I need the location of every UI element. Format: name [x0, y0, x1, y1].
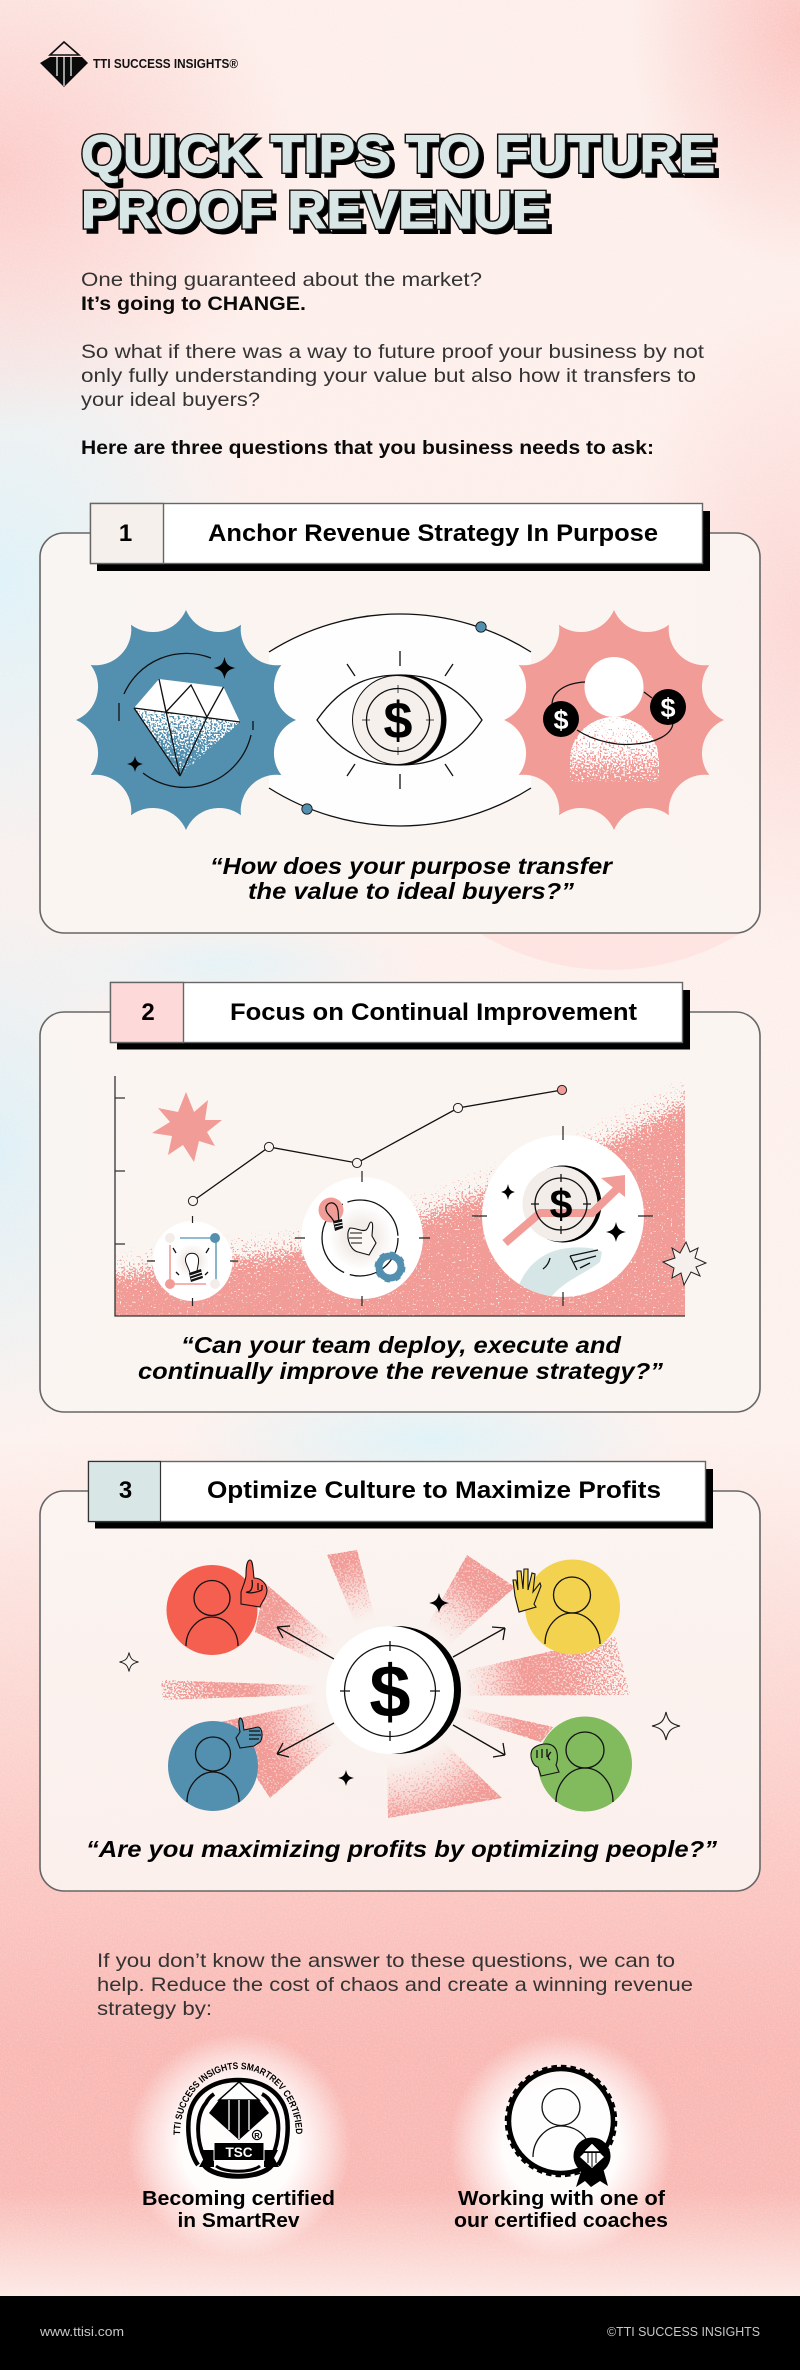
illustration: buyer burst: $ — [660, 693, 676, 723]
intro text: One thing guaranteed about the market? — [81, 269, 482, 291]
quote 3: “Are you maximizing profits by optimizing people?” — [86, 1836, 718, 1862]
label: Becoming certified — [142, 2188, 335, 2210]
person: green — [531, 1716, 632, 1812]
header: section 3: 3 — [119, 1477, 132, 1504]
intro text: Here are three questions that you business needs to ask: — [81, 437, 654, 459]
label — [454, 2188, 668, 2232]
illustration: profit rays — [120, 1550, 680, 1825]
person: blue — [168, 1718, 262, 1811]
icon: growth coin — [472, 1126, 653, 1306]
panel: section 3 — [40, 1462, 760, 1891]
footer — [0, 2296, 800, 2370]
badge: certified coach — [506, 2066, 616, 2187]
title — [81, 125, 719, 244]
icon: growth coin: $ — [550, 1181, 573, 1227]
header: section 3 — [88, 1462, 713, 1528]
header: section 2: 2 — [141, 999, 155, 1026]
star: outline — [663, 1242, 706, 1285]
label: our certified coaches — [454, 2210, 668, 2232]
label: Working with one of — [458, 2188, 665, 2210]
header: section 1 — [90, 504, 710, 571]
header: section 1: Anchor Revenue Strategy In Purpose — [208, 520, 658, 547]
certification option — [132, 2038, 346, 2248]
quote 1 — [210, 853, 613, 904]
rays: stippled layer — [161, 1550, 630, 1818]
header: section 3: Optimize Culture to Maximize Profits — [207, 1477, 661, 1504]
intro text: your ideal buyers? — [81, 389, 260, 411]
chart: revenue growth — [114, 1074, 708, 1317]
closing text: strategy by: — [97, 1998, 212, 2020]
coin — [326, 1626, 461, 1754]
closing text: help. Reduce the cost of chaos and create a winning revenue — [97, 1974, 693, 1996]
person: yellow — [513, 1560, 620, 1654]
footer: www.ttisi.com — [39, 2324, 124, 2339]
quote 2: “Can your team deploy, execute and — [181, 1332, 622, 1358]
title: QUICK TIPS TO FUTURE — [85, 129, 719, 188]
badge: SmartRev certified — [174, 2062, 302, 2179]
illustration: diamond burst — [76, 610, 296, 830]
label — [142, 2188, 335, 2232]
coaching option — [449, 2033, 673, 2257]
badge: SmartRev certified: R — [254, 2131, 260, 2140]
intro text: So what if there was a way to future proof your business by not — [81, 341, 705, 363]
intro text: It’s going to CHANGE. — [81, 293, 306, 315]
header: section 1: 1 — [119, 520, 132, 547]
panel: section 1 — [40, 504, 760, 933]
closing text: If you don’t know the answer to these questions, we can to — [97, 1950, 675, 1972]
illustration: value eye: $ — [384, 692, 413, 750]
logo: TTI SUCCESS INSIGHTS® — [93, 56, 238, 71]
header: section 2: Focus on Continual Improvement — [230, 999, 637, 1026]
closing text — [97, 1950, 693, 2020]
logo — [40, 42, 238, 87]
title: PROOF REVENUE — [81, 181, 548, 240]
quote 2: continually improve the revenue strategy?” — [138, 1358, 664, 1384]
intro text: only fully understanding your value but also how it transfers to — [81, 365, 696, 387]
icon: thumbs up cycle — [295, 1171, 430, 1306]
illustration: value eye — [269, 614, 531, 826]
area: rising pink field — [116, 1074, 685, 1316]
footer: ©TTI SUCCESS INSIGHTS — [607, 2324, 760, 2339]
label: in SmartRev — [178, 2210, 300, 2232]
intro text — [81, 269, 705, 459]
illustration: buyer burst: $ — [553, 705, 569, 735]
star: pink — [152, 1092, 222, 1162]
title: PROOF REVENUE — [85, 185, 552, 244]
title: QUICK TIPS TO FUTURE — [81, 125, 715, 184]
title: QUICK TIPS TO FUTURE — [81, 125, 715, 184]
quote 1: the value to ideal buyers?” — [248, 878, 575, 904]
quote 1: “How does your purpose transfer — [210, 853, 613, 879]
illustration: buyer burst — [504, 610, 724, 830]
person: red — [166, 1560, 267, 1655]
coin: $ — [369, 1650, 411, 1733]
header: section 2 — [110, 982, 690, 1050]
panel: section 2 — [40, 982, 760, 1412]
title: PROOF REVENUE — [81, 181, 548, 240]
quote 2 — [138, 1332, 664, 1384]
icon: idea circle — [147, 1216, 238, 1306]
badge: SmartRev certified: TSC — [226, 2145, 253, 2160]
rays: smooth under-layer — [161, 1550, 630, 1818]
badge: SmartRev certified: TTI SUCCESS INSIGHTS SMARTREV CERTIFIED — [174, 2062, 302, 2135]
